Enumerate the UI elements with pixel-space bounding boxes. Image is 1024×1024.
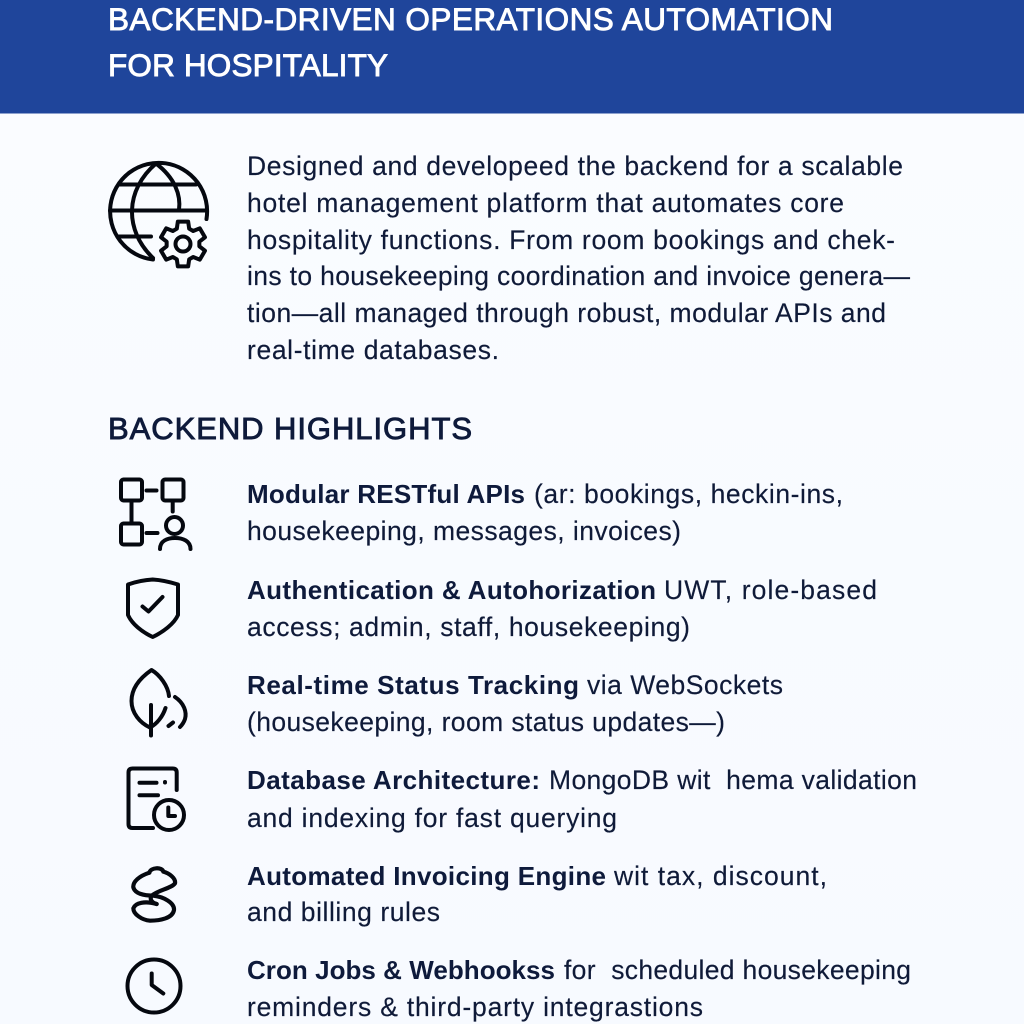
highlight: invoicing: and billing rules xyxy=(247,897,440,927)
highlight: cron jobs: reminders & third-party integrastions xyxy=(247,992,703,1022)
title: BACKEND-DRIVEN OPERATIONS AUTOMATION xyxy=(108,1,833,37)
highlight: cron jobs xyxy=(247,955,911,1022)
highlight: database: MongoDB wit hema validation xyxy=(549,765,917,795)
highlight: cron jobs: Cron Jobs & Webhookss xyxy=(247,955,555,985)
section heading: BACKEND HIGHLIGHTS xyxy=(108,411,472,446)
highlight: modular APIs: Modular RESTful APIs xyxy=(247,479,525,509)
intro paragraph: ins to housekeeping coordination and invoice genera— xyxy=(247,261,910,291)
intro paragraph: tion—all managed through robust, modular APIs and xyxy=(247,298,886,328)
icon: leaf with signal arcs xyxy=(132,670,186,736)
header banner xyxy=(0,0,1024,114)
title: FOR HOSPITALITY xyxy=(108,47,388,83)
title xyxy=(108,1,833,83)
intro paragraph: hotel management platform that automates core xyxy=(247,188,844,218)
highlight: real-time tracking: (housekeeping, room status updates—) xyxy=(247,707,725,737)
highlight: authentication xyxy=(247,575,877,642)
highlight: cron jobs: for scheduled housekeeping xyxy=(564,955,911,985)
icon: dollar sign xyxy=(133,868,175,921)
icon: modular API nodes and user xyxy=(121,480,190,549)
highlight: real-time tracking: via WebSockets xyxy=(587,670,783,700)
highlight: invoicing xyxy=(247,861,827,927)
highlight: invoicing: wit tax, discount, xyxy=(613,861,827,891)
intro paragraph: Designed and developeed the backend for a scalable xyxy=(247,151,903,181)
intro paragraph: real-time databases. xyxy=(247,335,499,365)
intro paragraph: hospitality functions. From room bookings and chek- xyxy=(247,225,895,255)
icon: globe with gear xyxy=(110,163,207,266)
highlight: modular APIs: housekeeping, messages, invoices) xyxy=(247,516,681,546)
icon: clock xyxy=(128,960,180,1012)
icon: shield with check xyxy=(128,580,178,637)
highlight: invoicing: Automated Invoicing Engine xyxy=(247,861,606,891)
highlight: real-time tracking: Real-time Status Tracking xyxy=(247,670,579,700)
intro paragraph xyxy=(247,151,910,365)
highlight: modular APIs xyxy=(247,479,843,546)
icon: document with clock xyxy=(128,768,184,830)
highlight: authentication: access; admin, staff, housekeeping) xyxy=(247,612,690,642)
highlight: real-time tracking xyxy=(247,670,783,737)
highlight: modular APIs: (ar: bookings, heckin-ins, xyxy=(534,479,843,509)
highlight: authentication: UWT, role-based xyxy=(664,575,877,605)
highlight: database xyxy=(247,765,917,833)
highlight: database: Database Architecture: xyxy=(247,765,540,795)
highlight: authentication: Authentication & Autohorization xyxy=(247,575,656,605)
highlight: database: and indexing for fast querying xyxy=(247,803,617,833)
